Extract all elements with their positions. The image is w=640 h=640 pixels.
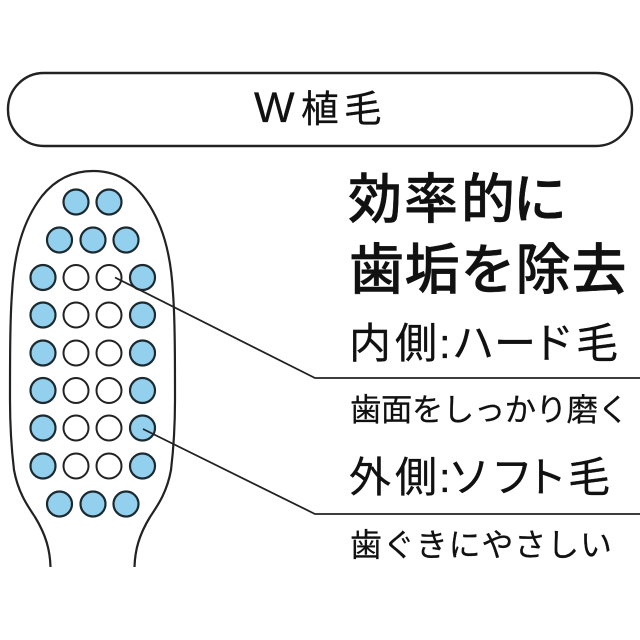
leader line: inner bristles (115, 278, 640, 378)
leader line: outer bristles (143, 429, 640, 514)
inner hard bristles (64, 265, 122, 478)
inner bristle description: 歯面をしっかり磨く (350, 392, 629, 428)
outer bristle label: 外側:ソフト毛 (349, 454, 610, 501)
title pill (8, 73, 632, 146)
outer bristle description: 歯ぐきにやさしい (350, 527, 612, 563)
title pill: 毛 (344, 88, 382, 130)
inner bristle label: 内側:ハード毛 (349, 320, 618, 367)
title pill: W (254, 84, 295, 132)
toothbrush head diagram (10, 171, 175, 567)
title pill: 植 (301, 88, 338, 130)
outer soft bristles (30, 190, 155, 516)
headline: 効率的に (348, 170, 567, 230)
brush head outline (10, 171, 175, 567)
headline: 歯垢を除去 (349, 239, 627, 301)
headline (348, 170, 627, 301)
